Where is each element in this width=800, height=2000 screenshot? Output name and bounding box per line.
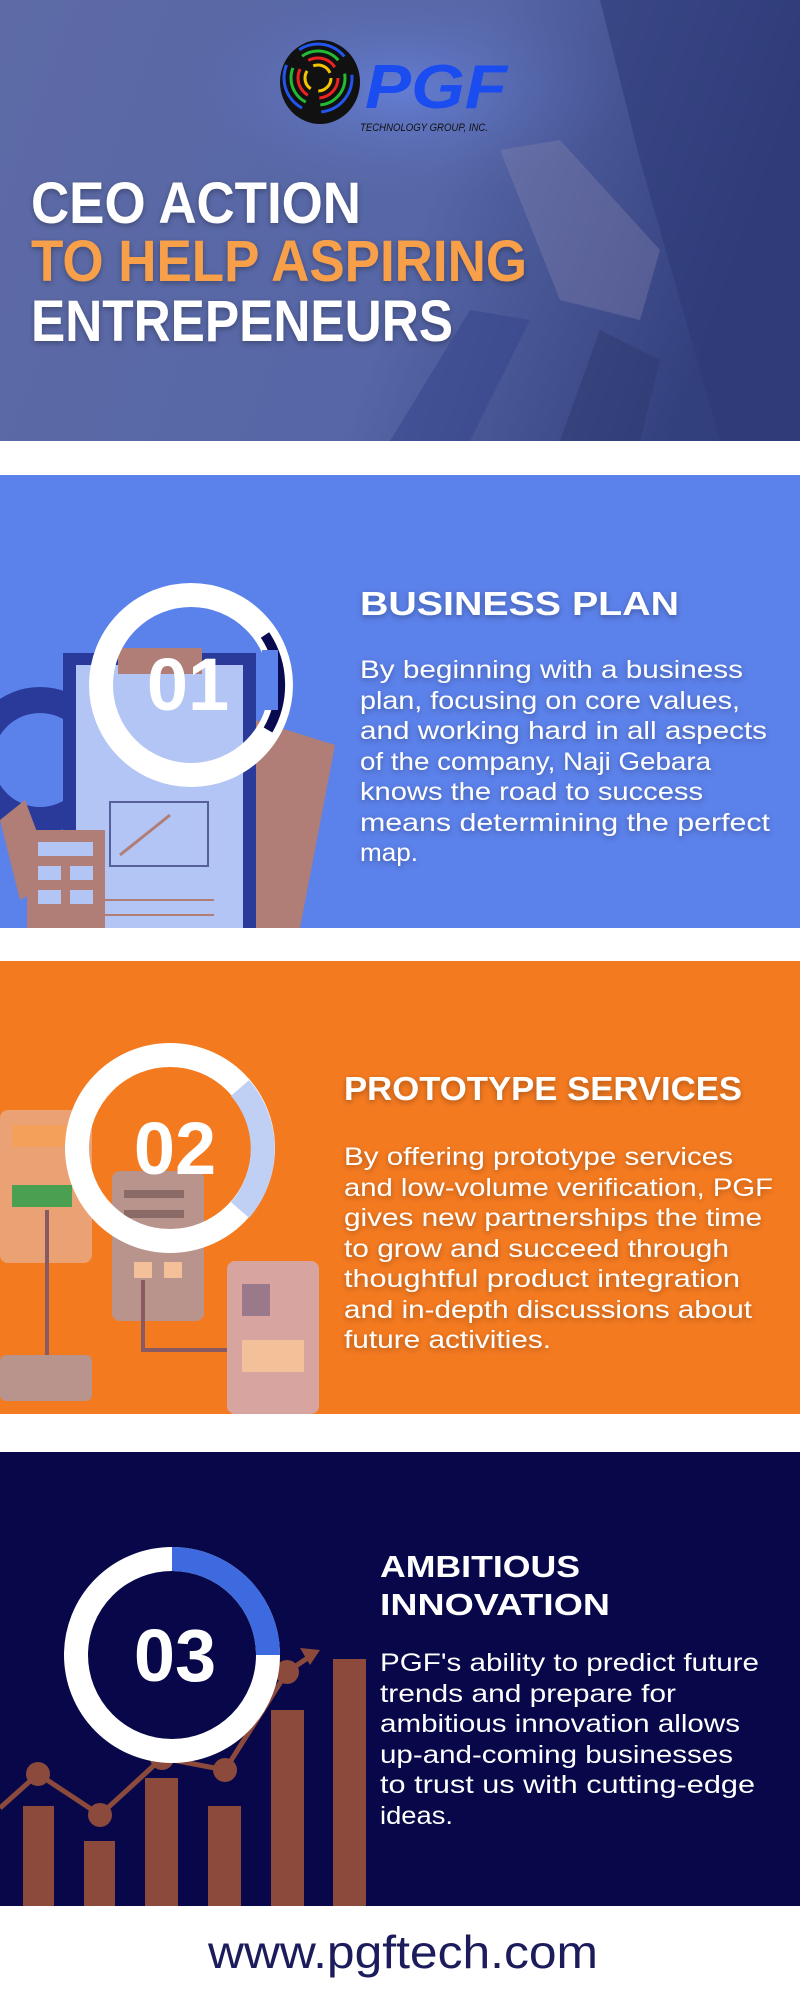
number circle 01 xyxy=(101,595,281,775)
title: ENTREPENEURS xyxy=(31,289,453,354)
heading: ambitious innovation xyxy=(380,1549,610,1622)
illustration: clipboard xyxy=(0,648,335,928)
header panel xyxy=(0,0,800,441)
text: business plan body: map. xyxy=(360,839,418,867)
number circle 02: 02 xyxy=(134,1107,216,1190)
logo: PGF xyxy=(280,40,509,134)
title: TO HELP ASPIRING xyxy=(31,229,527,294)
text: ambitious innovation body: trends and prepare for xyxy=(380,1680,676,1708)
text: ambitious innovation body: PGF's ability to predict future xyxy=(380,1649,759,1677)
logo: PGF: TECHNOLOGY GROUP, INC. xyxy=(360,122,488,134)
number circle 02 xyxy=(77,1055,263,1241)
number circle 03 xyxy=(76,1559,268,1751)
text: prototype services body: By offering prototype services xyxy=(344,1143,733,1171)
panel: ambitious innovation xyxy=(0,1452,800,1906)
text: ambitious innovation body: to trust us with cutting-edge xyxy=(380,1771,755,1799)
bar chart xyxy=(0,1648,366,1906)
text: ambitious innovation body: ambitious innovation allows xyxy=(380,1710,740,1738)
text: prototype services body: gives new partnerships the time xyxy=(344,1204,762,1232)
panel: prototype services xyxy=(0,961,800,1414)
heading: prototype services: PROTOTYPE SERVICES xyxy=(344,1070,742,1107)
text: prototype services body: and in-depth discussions about xyxy=(344,1296,752,1324)
number circle 03: 03 xyxy=(134,1614,216,1697)
text: business plan body xyxy=(360,656,770,867)
heading: ambitious innovation: INNOVATION xyxy=(380,1587,610,1622)
text: ambitious innovation body: ideas. xyxy=(380,1802,453,1830)
text: prototype services body xyxy=(344,1143,773,1354)
logo: PGF: PGF xyxy=(365,53,509,122)
text: prototype services body: thoughtful product integration xyxy=(344,1265,740,1293)
text: business plan body: of the company, Naji Gebara xyxy=(360,748,711,776)
text: ambitious innovation body: up-and-coming businesses xyxy=(380,1741,733,1769)
text: business plan body: plan, focusing on core values, xyxy=(360,687,740,715)
text: business plan body: By beginning with a business xyxy=(360,656,743,684)
title xyxy=(31,171,527,354)
text: prototype services body: and low-volume verification, PGF xyxy=(344,1174,773,1202)
title: CEO ACTION xyxy=(31,171,361,236)
panel: business plan xyxy=(0,475,800,928)
text: business plan body: and working hard in all aspects xyxy=(360,717,767,745)
heading: ambitious innovation: AMBITIOUS xyxy=(380,1549,580,1584)
footer: website: www.pgftech.com xyxy=(207,1926,598,1978)
text: business plan body: means determining the perfect xyxy=(360,809,770,837)
text: ambitious innovation body xyxy=(380,1649,759,1830)
text: business plan body: knows the road to success xyxy=(360,778,703,806)
heading: business plan: BUSINESS PLAN xyxy=(360,585,679,622)
number circle 01: 01 xyxy=(147,643,229,726)
illustration: devices xyxy=(0,1110,319,1414)
text: prototype services body: to grow and succeed through xyxy=(344,1235,729,1263)
text: prototype services body: future activities. xyxy=(344,1326,551,1354)
